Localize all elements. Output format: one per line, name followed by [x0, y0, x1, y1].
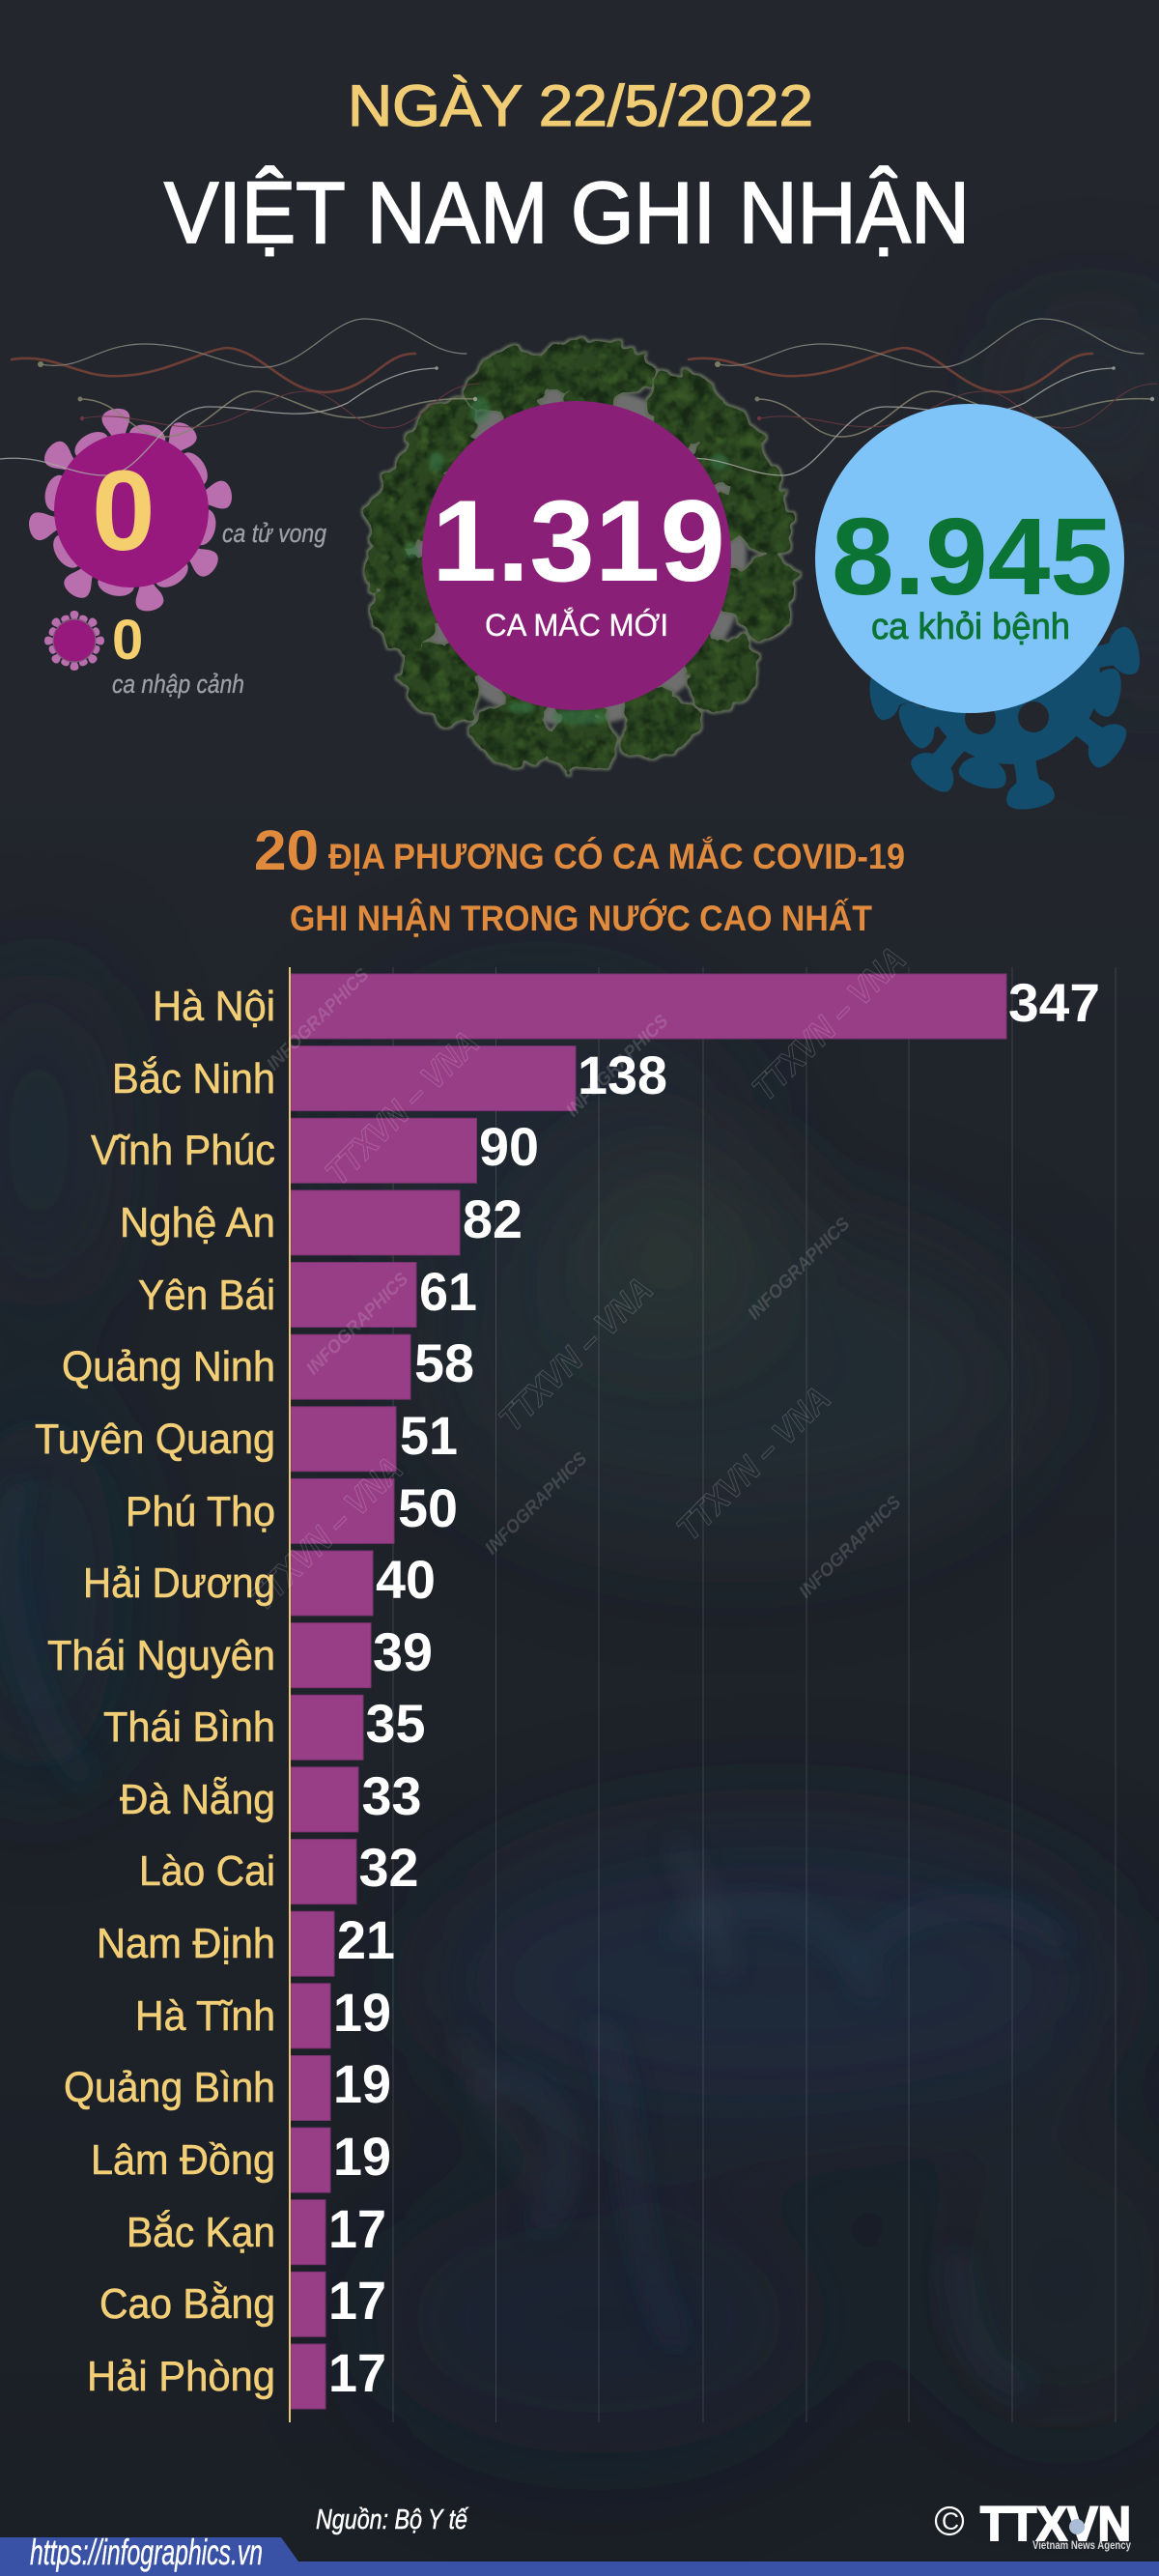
chart heading: ĐỊA PHƯƠNG CÓ CA MẮC COVID-19 — [328, 836, 905, 876]
title: main heading: VIỆT NAM GHI NHẬN — [164, 165, 970, 262]
watermarks: INFOGRAPHICS — [744, 1214, 854, 1324]
row: Nam Định: 21 — [337, 1909, 395, 1970]
row: Tuyên Quang: 51 — [400, 1405, 458, 1466]
row: Vĩnh Phúc: 90 — [479, 1116, 539, 1177]
watermarks: TTXVN – VNA — [240, 1449, 410, 1618]
row: Đà Nẵng: 33 — [361, 1765, 421, 1826]
watermarks: TTXVN – VNA — [668, 1379, 838, 1548]
source note: Nguồn: Bộ Y tế — [316, 2504, 468, 2535]
icon: small purple virus — [44, 611, 104, 671]
illustration: blue coronavirus behind recovered — [866, 587, 1144, 813]
watermarks: TTXVN – VNA — [744, 939, 914, 1108]
chart heading: GHI NHẬN TRONG NƯỚC CAO NHẤT — [290, 898, 872, 938]
chart heading: 20 — [254, 819, 319, 882]
watermarks: INFOGRAPHICS — [263, 964, 373, 1074]
stat: recovered — [815, 404, 1124, 713]
recovered caption: ca khỏi bệnh — [871, 607, 1070, 647]
row: Bắc Kạn: 17 — [328, 2198, 386, 2259]
row: Tuyên Quang: Tuyên Quang — [35, 1416, 275, 1463]
new cases number: 1.319 — [432, 476, 725, 606]
row: Nam Định: Nam Định — [97, 1920, 275, 1967]
watermarks: INFOGRAPHICS — [795, 1492, 905, 1602]
illustration: colored wires left — [0, 319, 480, 475]
logo: TTXVN: TTXVN — [980, 2497, 1131, 2551]
logo: TTXVN: C — [942, 2508, 959, 2535]
stat: new cases — [422, 401, 731, 710]
chart heading — [254, 819, 905, 938]
row: Phú Thọ — [126, 1477, 458, 1543]
stat: deaths: 0 — [92, 447, 155, 575]
row: Lâm Đồng: Lâm Đồng — [91, 2136, 275, 2184]
row: Quảng Bình: Quảng Bình — [64, 2064, 275, 2111]
row: Cao Bằng: Cao Bằng — [99, 2280, 275, 2328]
watermarks: TTXVN – VNA — [491, 1270, 661, 1439]
watermarks: TTXVN – VNA — [317, 1023, 487, 1192]
row: Nam Định — [97, 1909, 395, 1976]
row: Bắc Ninh: 138 — [578, 1045, 667, 1105]
footer bar with website — [0, 2533, 1159, 2576]
row: Vĩnh Phúc: Vĩnh Phúc — [91, 1127, 275, 1174]
row: Tuyên Quang — [35, 1405, 458, 1472]
row: Thái Bình — [103, 1693, 425, 1760]
watermarks — [240, 939, 914, 1618]
row: Thái Nguyên: 39 — [373, 1621, 433, 1682]
row: Bắc Ninh — [112, 1045, 667, 1111]
illustration: green coronavirus behind new cases — [361, 335, 803, 774]
illustration: purple virus, deaths — [27, 407, 234, 614]
row: Nghệ An — [120, 1188, 523, 1255]
row: Hải Dương: 40 — [376, 1549, 436, 1610]
logo: TTXVN: Vietnam News Agency — [1032, 2538, 1131, 2552]
row: Thái Nguyên — [47, 1621, 433, 1688]
row: Lâm Đồng — [91, 2126, 391, 2192]
row: Đà Nẵng — [120, 1765, 421, 1832]
row: Hà Tĩnh: Hà Tĩnh — [135, 1992, 275, 2040]
illustration: colored wires right — [677, 319, 1157, 475]
row: Hải Phòng: Hải Phòng — [87, 2353, 275, 2400]
recovered number: 8.945 — [832, 496, 1113, 617]
row: Hà Tĩnh — [135, 1982, 391, 2048]
row: Hà Nội: 347 — [1008, 972, 1100, 1033]
row: Thái Nguyên: Thái Nguyên — [47, 1632, 275, 1679]
row: Quảng Bình: 19 — [333, 2053, 391, 2114]
new cases caption: CA MẮC MỚI — [485, 608, 668, 643]
row: Hải Dương: Hải Dương — [83, 1560, 275, 1607]
row: Lào Cai — [139, 1837, 419, 1904]
row: Vĩnh Phúc — [91, 1116, 539, 1183]
watermarks: INFOGRAPHICS — [302, 1269, 412, 1379]
footer bar with website: https://infographics.vn — [30, 2533, 263, 2572]
row: Yên Bái: Yên Bái — [138, 1272, 275, 1319]
row: Bắc Kạn — [127, 2198, 386, 2265]
deaths caption: ca tử vong — [222, 519, 326, 548]
row: Thái Bình: Thái Bình — [103, 1703, 275, 1751]
row: Hải Phòng — [87, 2342, 386, 2409]
stat: deaths — [92, 447, 326, 575]
row: Lâm Đồng: 19 — [333, 2126, 391, 2187]
row: Phú Thọ: Phú Thọ — [126, 1488, 275, 1535]
title: date: NGÀY 22/5/2022 — [348, 73, 813, 138]
row: Hà Tĩnh: 19 — [333, 1982, 391, 2043]
row: Thái Bình: 35 — [365, 1693, 425, 1754]
row: Hải Dương — [83, 1549, 436, 1616]
row: Bắc Ninh: Bắc Ninh — [112, 1055, 275, 1102]
stat: imported cases — [44, 609, 244, 699]
watermarks: INFOGRAPHICS — [562, 1011, 672, 1121]
row: Lào Cai: Lào Cai — [139, 1847, 275, 1895]
row: Nghệ An: 82 — [463, 1188, 523, 1249]
imported caption: ca nhập cảnh — [112, 670, 244, 699]
row: Bắc Kạn: Bắc Kạn — [127, 2209, 275, 2256]
row: Yên Bái: 61 — [419, 1261, 477, 1322]
row: Hải Phòng: 17 — [328, 2342, 386, 2403]
row: Nghệ An: Nghệ An — [120, 1199, 275, 1246]
imported count: 0 — [112, 609, 143, 672]
row: Quảng Ninh: 58 — [414, 1332, 474, 1393]
row: Yên Bái — [138, 1261, 477, 1328]
row: Hà Nội: Hà Nội — [153, 983, 275, 1030]
bar chart — [35, 967, 1116, 2422]
row: Đà Nẵng: Đà Nẵng — [120, 1776, 275, 1823]
watermarks: INFOGRAPHICS — [481, 1448, 591, 1559]
row: Hà Nội — [153, 972, 1100, 1039]
row: Quảng Ninh — [62, 1332, 474, 1399]
row: Lào Cai: 32 — [359, 1837, 419, 1898]
row: Quảng Bình — [64, 2053, 391, 2120]
row: Phú Thọ: 50 — [398, 1477, 458, 1538]
row: Cao Bằng — [99, 2270, 386, 2336]
row: Quảng Ninh: Quảng Ninh — [62, 1343, 275, 1390]
row: Cao Bằng: 17 — [328, 2270, 386, 2331]
